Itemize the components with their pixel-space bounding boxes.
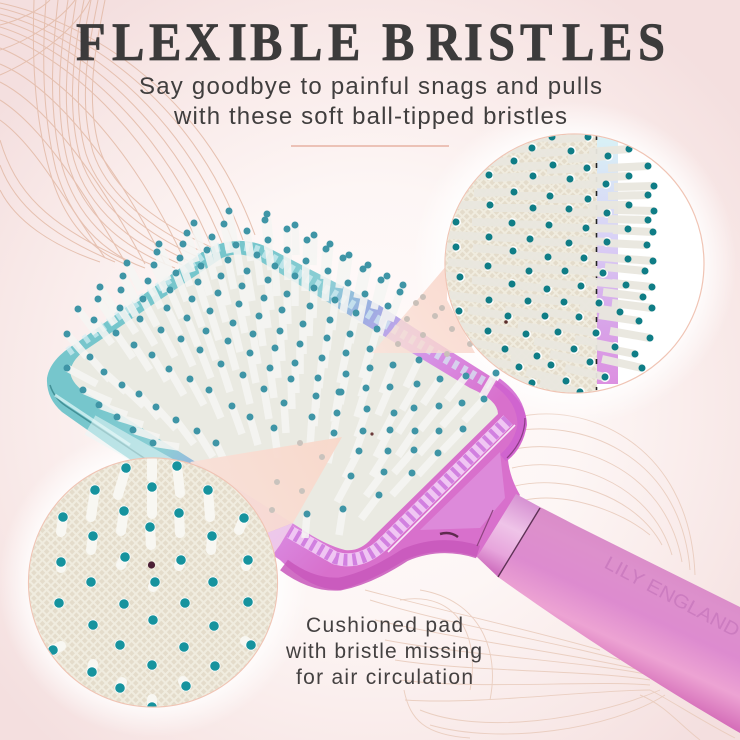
wave lines top left — [0, 0, 255, 268]
caption: for air circulation — [296, 666, 473, 689]
lower magenta chrome edge — [284, 547, 478, 584]
brush head frame — [47, 241, 527, 590]
missing bristle spot on pad — [370, 432, 374, 436]
subtitle: Say goodbye to painful snags and pulls — [139, 73, 602, 100]
white glow around bottom left circle — [0, 428, 308, 738]
brush handle — [498, 507, 740, 733]
bristle stems — [67, 211, 496, 538]
brush collar — [477, 494, 540, 577]
caption: with bristle missing — [285, 640, 482, 663]
magnified circle: bristle tips — [444, 133, 705, 394]
title: FLEXIBLE BRISTLES — [76, 13, 665, 73]
zoom cone to bottom left circle — [190, 437, 342, 600]
subtitle: with these soft ball-tipped bristles — [173, 103, 567, 130]
caption: Cushioned pad — [306, 614, 463, 637]
wave lines bottom right — [365, 414, 735, 740]
cushion pad — [70, 254, 498, 550]
brand name on handle: LILY ENGLAND — [601, 553, 740, 642]
subtitle — [139, 73, 602, 130]
bristle ball tips — [67, 211, 496, 514]
caption — [285, 614, 482, 689]
white glow around top right circle — [412, 102, 736, 426]
magnified circle: cushion pad — [25, 455, 281, 711]
zoom cone to top right circle — [372, 265, 475, 354]
air hole marker — [148, 561, 155, 569]
